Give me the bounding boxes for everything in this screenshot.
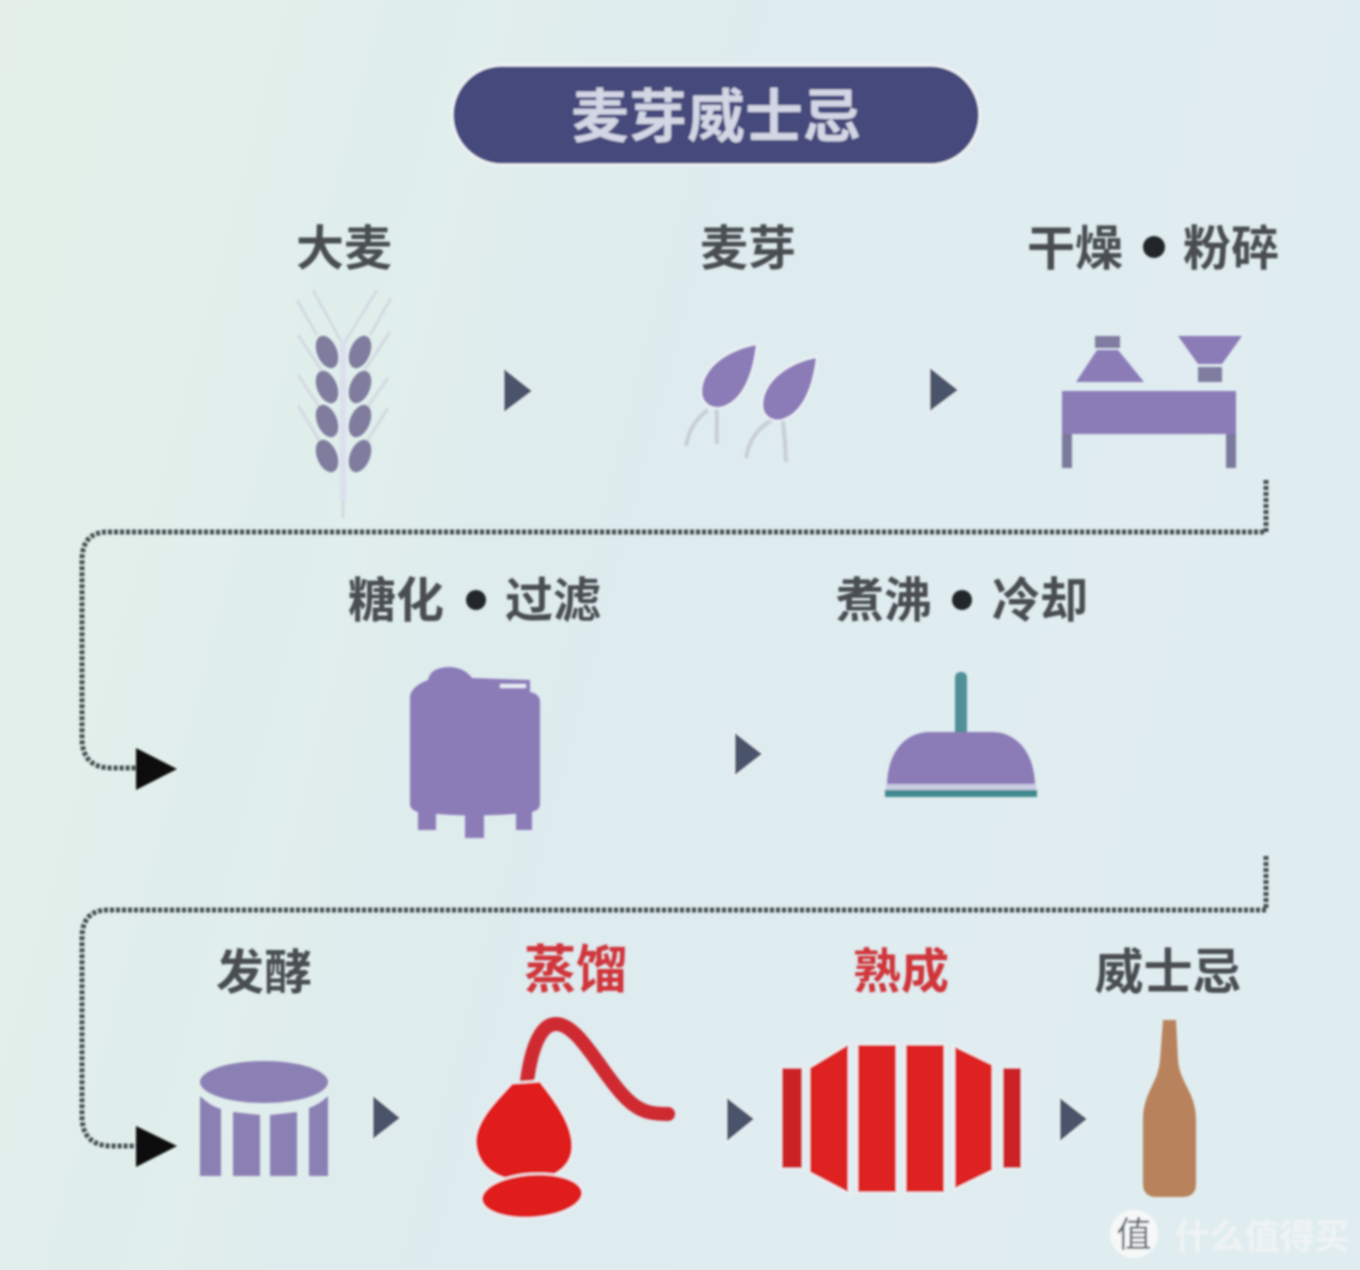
label: drying and milling: 粉碎 [1183, 223, 1279, 276]
icon: fermentation vat [200, 1061, 328, 1176]
label: distillation: 蒸馏 [524, 942, 628, 1000]
label: boiling and cooling: 煮沸 [836, 575, 932, 628]
icon: barley [297, 290, 391, 518]
icon: malt [686, 345, 816, 462]
watermark [1110, 1210, 1350, 1258]
icon: mash tun [410, 667, 540, 838]
label: fermentation: 发酵 [216, 947, 312, 1000]
icon: barrel [782, 1045, 1021, 1192]
label: drying and milling: 干燥 [1027, 223, 1123, 276]
label: mashing and filtering: 过滤 [505, 575, 601, 628]
label: whisky: 威士忌 [1094, 946, 1242, 1000]
title: 麦芽威士忌 [571, 85, 861, 150]
connector: row two to row three [82, 856, 1266, 1167]
arrow: aging to whisky [1060, 1098, 1087, 1141]
title [452, 65, 980, 165]
arrow: malt to drying [930, 368, 958, 411]
arrow: barley to malt [504, 369, 532, 412]
label: mashing and filtering: 糖化 [348, 575, 444, 628]
label: malt: 麦芽 [700, 223, 796, 276]
icon: boiling kettle [885, 672, 1037, 797]
icon: pot still [476, 1024, 668, 1220]
icon: drying and milling machine [1062, 336, 1242, 468]
arrow: distillation to aging [727, 1098, 754, 1141]
label: barley: 大麦 [296, 223, 392, 276]
watermark: 值 [1116, 1216, 1152, 1255]
label: maturation: 熟成 [853, 946, 949, 999]
label: boiling and cooling: 冷却 [992, 575, 1088, 628]
icon: whisky bottle [1143, 1020, 1196, 1197]
label: mashing and filtering [348, 575, 601, 628]
arrow: mash to boil [735, 733, 762, 775]
label: drying and milling [1027, 223, 1279, 276]
connector: row one to row two [82, 480, 1266, 790]
watermark: 什么值得买 [1174, 1218, 1350, 1257]
arrow: fermentation to distillation [373, 1096, 400, 1139]
label: boiling and cooling [836, 575, 1088, 628]
